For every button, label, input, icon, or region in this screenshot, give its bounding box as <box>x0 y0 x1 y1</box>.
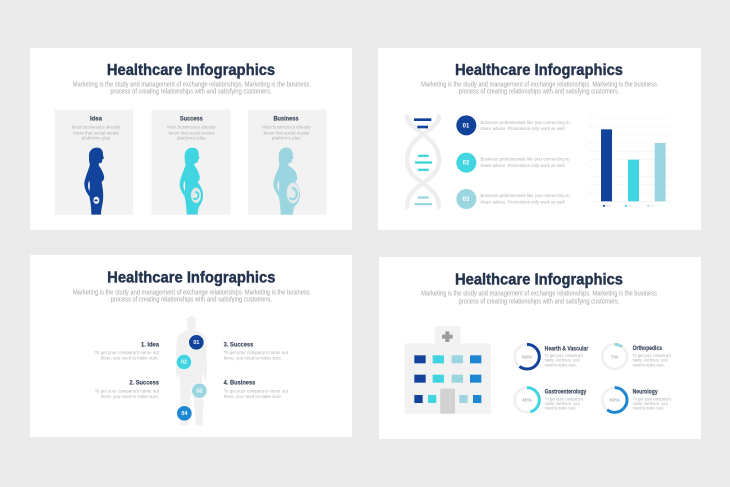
step 02 <box>456 153 570 173</box>
marker 03 <box>192 383 207 398</box>
subtitle: Marketing is the study and management of exchange relationships. Marketing is the business <box>73 289 310 296</box>
text block: 2. success <box>95 380 160 400</box>
text block: 3. success <box>224 341 289 362</box>
bar chart: 5 <box>590 151 591 153</box>
bar chart: 7 <box>590 134 591 136</box>
step 01: 01 <box>463 123 470 129</box>
label: heart and vascular: Hearth & Vascular <box>545 345 589 352</box>
label: orthopedics: name out there, you <box>633 358 668 363</box>
text block: 4. business: 4. Business <box>224 379 256 386</box>
text block: 4. business: To get your company's name out <box>224 388 289 394</box>
subtitle: process of creating relationships with and satisfying customers. <box>459 298 619 305</box>
label: orthopedics: need to make sure. <box>633 362 665 367</box>
donut: heart and vascular 60%: 60% <box>522 354 533 360</box>
card: business <box>248 110 327 215</box>
bar chart: 3 <box>590 168 591 170</box>
label: orthopedics: Orthopedics <box>633 345 662 352</box>
step 02: Business professionals like you connecting to <box>480 157 570 163</box>
label: orthopedics: To get your company's <box>633 353 671 358</box>
card heading: success: Success <box>180 116 203 123</box>
card text: success: Most businesses already <box>167 125 216 131</box>
label: gastroenterology: need to make sure. <box>545 406 577 411</box>
icon: mid pregnancy silhouette <box>180 148 203 215</box>
step 01 <box>456 115 570 135</box>
panel: body points <box>30 255 352 437</box>
text block: 1. idea: 1. Idea <box>141 341 159 348</box>
subtitle: Marketing is the study and management of exchange relationships. Marketing is the business <box>421 291 657 298</box>
step 02: 02 <box>463 161 470 167</box>
chart legend <box>603 205 655 208</box>
text block: 4. business <box>224 379 289 400</box>
subtitle <box>421 291 657 305</box>
marker 01 <box>189 335 204 350</box>
donut: gastroenterology 45%: 45% <box>522 398 533 404</box>
text block: 3. success: 3. Success <box>224 341 254 348</box>
icon: early pregnancy silhouette <box>84 148 104 215</box>
label: neurology <box>633 389 671 411</box>
step 01: share advice. Promotions only work as well. <box>480 126 566 132</box>
card text: business: Most businesses already <box>262 125 311 131</box>
card text: idea: Most businesses already <box>72 125 121 131</box>
step 03 <box>456 189 570 209</box>
donut: neurology 60%: 60% <box>610 398 620 404</box>
step 01: Business professionals like you connecting to <box>480 120 570 126</box>
text block: 3. success: there, you need to make sure. <box>224 356 282 362</box>
label: neurology: To get your company's <box>633 396 671 401</box>
text block: 3. success: To get your company's name out <box>224 350 289 356</box>
label: gastroenterology: name out there, you <box>545 401 580 406</box>
marker 04: 04 <box>181 411 187 417</box>
label: gastroenterology: To get your company's <box>545 396 583 401</box>
card text: success: know that social media <box>169 130 214 136</box>
chart legend: 2019 <box>606 206 611 208</box>
card text: success <box>167 125 216 142</box>
label: neurology: name out there, you <box>633 401 668 406</box>
step 03: Business professionals like you connecting to <box>480 193 570 199</box>
chart legend: 2020 <box>628 206 633 208</box>
marker 01: 01 <box>193 340 199 346</box>
card text: business: know that social media <box>264 130 309 136</box>
icon: human body silhouette <box>176 316 207 426</box>
card text: idea <box>72 125 121 142</box>
title: Healthcare Infographics <box>107 270 276 287</box>
subtitle: process of creating relationships with and satisfying customers. <box>111 297 272 304</box>
subtitle: Marketing is the study and management of exchange relationships. Marketing is the business <box>421 81 657 88</box>
text block: 1. idea: there, you need to make sure. <box>101 356 159 362</box>
step 03: share advice. Promotions only work as well. <box>480 199 566 205</box>
label: neurology: Neurology <box>633 389 658 396</box>
bar chart: 0 <box>590 193 591 195</box>
bar chart: 8 <box>590 126 591 128</box>
subtitle: process of creating relationships with and satisfying customers. <box>459 89 619 96</box>
subtitle: process of creating relationships with and satisfying customers. <box>110 89 272 96</box>
bar chart: 1 <box>590 184 591 186</box>
marker 04 <box>177 406 192 421</box>
card text: idea: platforms play <box>82 136 111 142</box>
label: orthopedics <box>633 345 671 367</box>
subtitle <box>73 81 310 96</box>
bar chart: 9 <box>590 118 591 120</box>
donut: orthopedics 7%: 7% <box>611 354 619 360</box>
text block: 2. success: 2. Success <box>129 380 159 387</box>
marker 03: 03 <box>196 388 202 394</box>
label: heart and vascular <box>545 345 589 367</box>
title: Healthcare Infographics <box>107 62 275 79</box>
donut: gastroenterology 45% <box>515 388 539 412</box>
subtitle <box>73 289 310 304</box>
label: heart and vascular: name out there, you <box>545 358 580 363</box>
card text: success: platforms play <box>177 136 206 142</box>
step 03: 03 <box>463 197 470 203</box>
label: neurology: need to make sure. <box>633 406 665 411</box>
card heading: idea: Idea <box>90 116 102 123</box>
icon: late pregnancy silhouette <box>273 148 300 215</box>
donut: orthopedics 7% <box>602 344 627 369</box>
card text: business: platforms play <box>272 136 301 142</box>
subtitle <box>421 81 657 96</box>
card: success <box>152 110 231 215</box>
text block: 2. success: To get your company's name out <box>95 388 160 394</box>
panel: hospital departments <box>379 257 701 439</box>
label: heart and vascular: need to make sure. <box>545 362 577 367</box>
marker 02: 02 <box>181 360 187 366</box>
bar chart: 4 <box>590 159 591 161</box>
donut: neurology 60% <box>602 388 627 412</box>
card text: idea: know that social media <box>73 130 119 136</box>
label: heart and vascular: To get your company's <box>545 353 583 358</box>
label: gastroenterology: Gastroenterology <box>545 389 587 396</box>
bar chart <box>590 118 671 208</box>
title: Healthcare Infographics <box>455 271 623 288</box>
bar chart: 2 <box>590 176 591 178</box>
card: idea <box>55 110 133 215</box>
card text: business <box>262 125 311 142</box>
icon: hospital building <box>405 326 491 414</box>
panel: pregnancy stages <box>30 48 352 230</box>
subtitle: Marketing is the study and management of exchange relationships. Marketing is the business <box>73 81 310 88</box>
text block: 4. business: there, you need to make sure. <box>224 394 282 400</box>
text block: 1. idea: To get your company's name out <box>95 350 160 356</box>
text block: 2. success: there, you need to make sure. <box>101 394 159 400</box>
donut: heart and vascular 60% <box>515 344 539 369</box>
step 02: share advice. Promotions only work as well. <box>480 163 566 169</box>
bar chart: 6 <box>590 143 591 145</box>
label: gastroenterology <box>545 389 587 411</box>
marker 02 <box>176 354 192 370</box>
title: Healthcare Infographics <box>455 62 623 79</box>
card heading: business: Business <box>273 116 299 123</box>
panel: dna and bar chart <box>378 48 701 230</box>
chart legend: 2021 <box>650 206 655 208</box>
icon: dna helix <box>407 116 439 207</box>
text block: 1. idea <box>95 341 160 362</box>
